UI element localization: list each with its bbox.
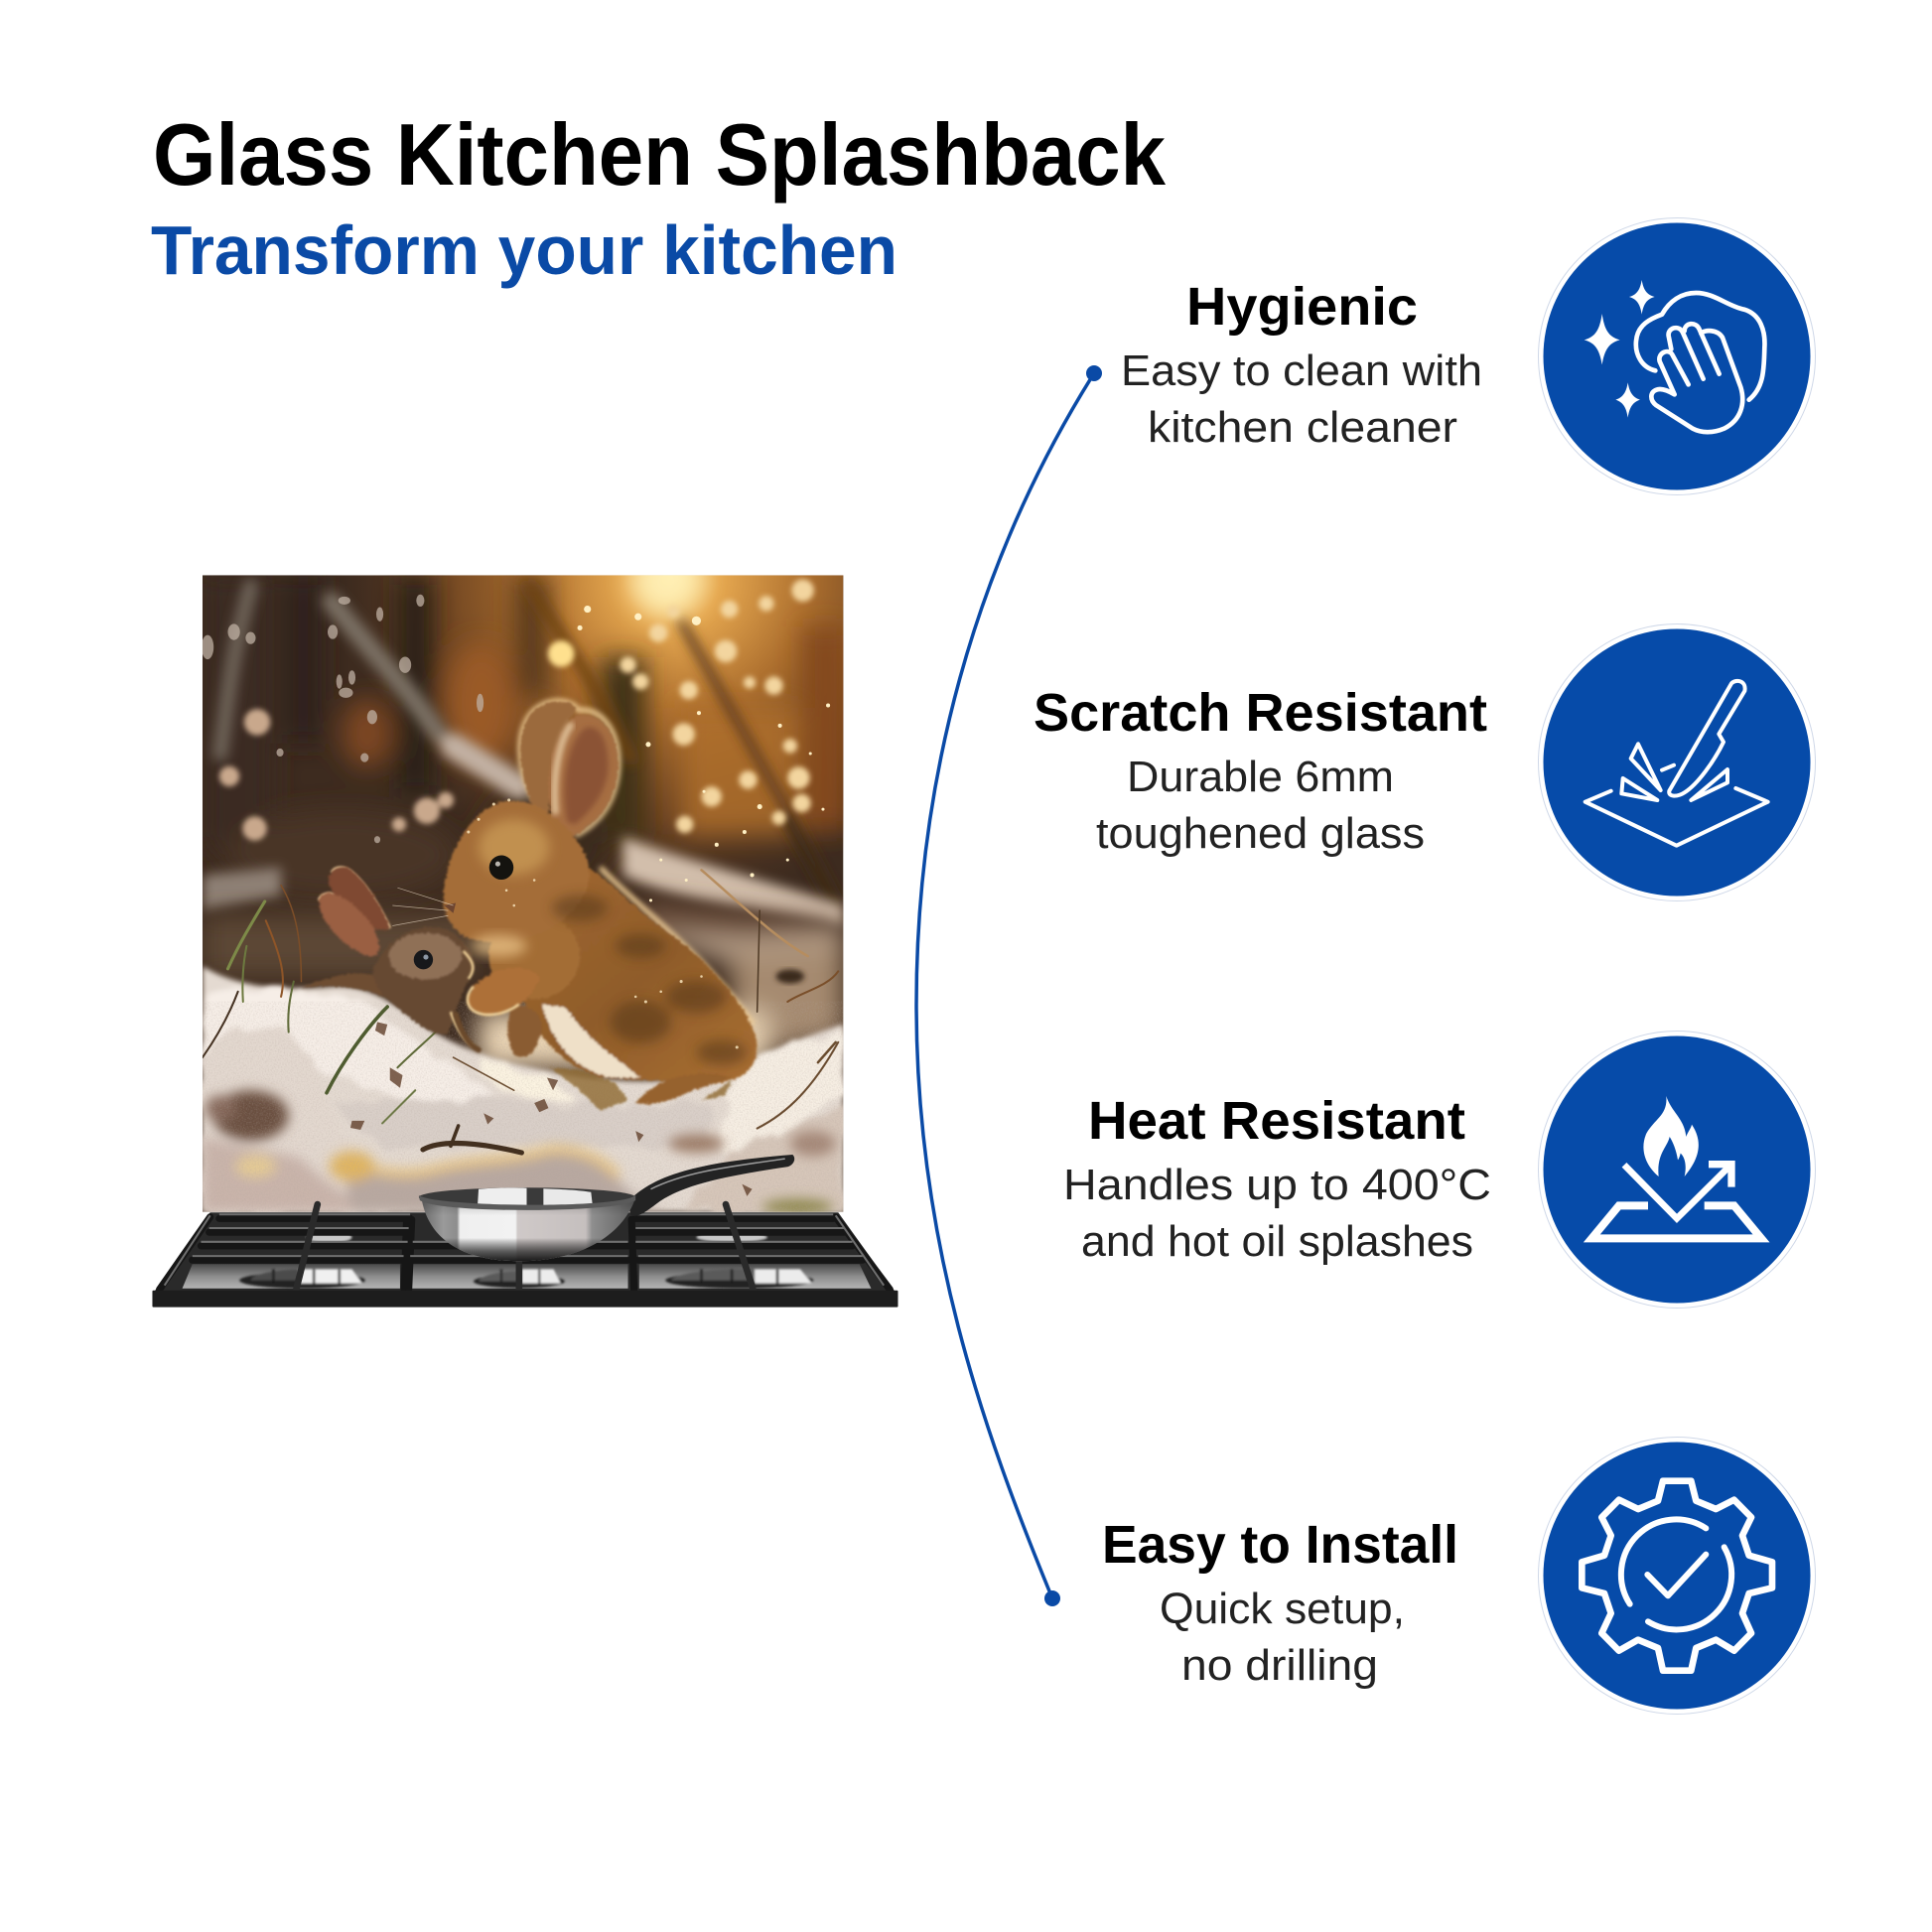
text: install description: no drilling [1181, 1641, 1378, 1690]
snow ground [203, 966, 843, 1212]
heading: easy to install: Easy to Install [1102, 1515, 1458, 1575]
text: heat description: and hot oil splashes [1081, 1217, 1473, 1266]
crossing grate supports [296, 1204, 754, 1290]
text: scratch description [1096, 753, 1425, 858]
text: heat description: Handles up to 400°C [1063, 1161, 1491, 1209]
small rabbit [301, 867, 479, 1049]
whiskers [392, 888, 454, 925]
connector arc [916, 365, 1102, 1606]
heading: scratch resistant: Scratch Resistant [1034, 683, 1487, 743]
splashback artwork: rabbits in snow [202, 546, 848, 1215]
leaves on snow [350, 1022, 753, 1196]
grate highlights [165, 1214, 884, 1286]
icon: gear with check mark [1539, 1438, 1815, 1714]
distant snow logs [203, 837, 843, 925]
heading: hygienic: Hygienic [1186, 277, 1418, 337]
golden debris [549, 1067, 732, 1111]
feature: hygienic [1121, 277, 1482, 452]
front bar [152, 1291, 897, 1308]
title: Glass Kitchen Splashback [153, 105, 1167, 204]
text: hygienic description: kitchen cleaner [1148, 403, 1457, 452]
snow speckle on fur [467, 798, 739, 1048]
feature: easy to install [1102, 1515, 1458, 1690]
text: install description: Quick setup, [1160, 1585, 1405, 1633]
hob surface [155, 1212, 895, 1292]
frying pan [419, 1155, 794, 1261]
bokeh snow [219, 579, 814, 841]
gas hob [152, 1204, 897, 1308]
text: install description [1160, 1585, 1405, 1690]
snow grain [203, 1002, 843, 1212]
foreground snow mounds [203, 1025, 413, 1212]
icon: flame on reflective surface [1539, 1031, 1815, 1309]
twigs and grass [203, 870, 838, 1153]
feature: heat resistant [1063, 1091, 1491, 1266]
text: scratch description: toughened glass [1096, 809, 1425, 858]
burners [239, 1231, 813, 1289]
text: hygienic description: Easy to clean with [1121, 346, 1482, 395]
large rabbit [443, 701, 757, 1104]
icon: knife on glass [1539, 623, 1815, 901]
subtitle: Transform your kitchen [151, 211, 897, 289]
icon: hand wiping with cloth [1539, 218, 1815, 494]
text: hygienic description [1121, 346, 1482, 452]
text: scratch description: Durable 6mm [1127, 753, 1394, 801]
heading: heat resistant: Heat Resistant [1088, 1091, 1465, 1151]
text: heat description [1063, 1161, 1491, 1266]
steel burner wells [183, 1264, 871, 1289]
product image: splashback above gas hob with pan [152, 546, 897, 1308]
grate bars [160, 1217, 890, 1290]
feature: scratch resistant [1034, 683, 1487, 858]
